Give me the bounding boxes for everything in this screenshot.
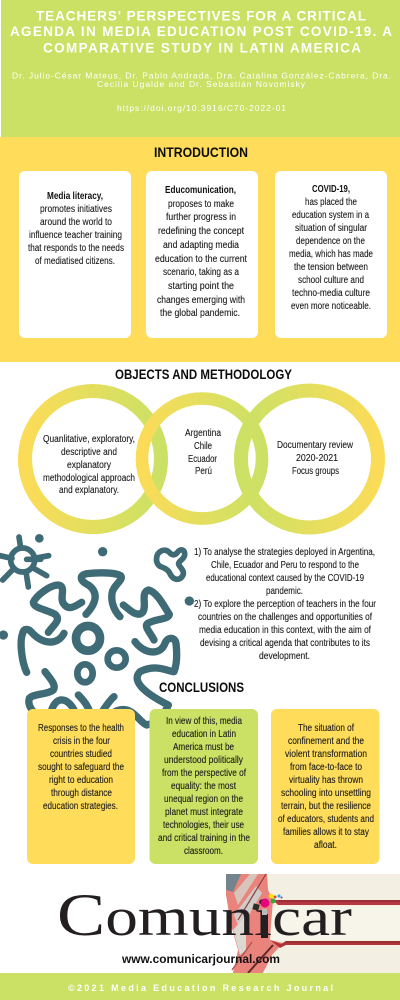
card: confinement and resilience: from face-to-face to [290, 762, 362, 773]
card: health crisis responses: crisis in the four [53, 736, 111, 747]
card: equality perspective [150, 709, 258, 864]
card: media literacy: Media literacy, [47, 190, 103, 202]
footer: ©2021 Media Education Research Journal [68, 983, 333, 993]
card: equality perspective: understood politically [164, 755, 243, 766]
ring text: methods: 2020-2021 [296, 453, 338, 464]
illustration: stack of books [226, 874, 400, 973]
heading: objects and methodology: OBJECTS AND METHODOLOGY [115, 367, 292, 382]
card: equality perspective: education in Latin [172, 729, 236, 740]
ring text: approach: and explanatory. [59, 485, 119, 496]
logo: Comunicar: Comunicar [57, 883, 352, 949]
card: confinement and resilience: The situation of [298, 723, 354, 734]
ring text: approach: methodological approach [43, 473, 135, 484]
card: covid-19: situation of singular [295, 223, 368, 234]
card: health crisis responses: right to education [49, 775, 113, 786]
card: health crisis responses: through distance [51, 788, 112, 799]
card: covid-19: has placed the [305, 197, 357, 208]
card: confinement and resilience: violent transformation [285, 749, 367, 760]
card: educomunication: scenario, taking as a [163, 267, 239, 278]
card: confinement and resilience: virtuality has thrown [289, 775, 363, 786]
card: covid-19: COVID-19, [312, 183, 350, 195]
card: equality perspective: equality: the most [171, 781, 236, 792]
icon: small germ [0, 537, 49, 587]
card: confinement and resilience: confinement and the [288, 736, 364, 747]
card: confinement and resilience: schooling into unsettling [281, 788, 371, 799]
title: COMPARATIVE STUDY IN LATIN AMERICA [43, 40, 361, 56]
icon: small blob [156, 550, 185, 579]
card: covid-19: dependence on the [296, 236, 365, 247]
title [10, 8, 392, 56]
card: confinement and resilience: of educators, students and [278, 814, 374, 825]
ring text: methods: Focus groups [292, 466, 339, 477]
icon: coronavirus illustration [0, 534, 194, 725]
card: educomunication: the global pandemic. [160, 308, 240, 319]
card: educomunication: proposes to make [168, 199, 234, 210]
card: confinement and resilience: families allows it to stay [283, 827, 369, 838]
card: equality perspective: In view of this, media [166, 716, 242, 727]
panel: introduction [0, 137, 400, 362]
card: educomunication: changes emerging with [157, 295, 245, 306]
ring text: approach: descriptive and [61, 447, 117, 458]
heading: introduction: INTRODUCTION [154, 145, 248, 160]
authors: Dr. Julio-César Mateus, Dr. Pablo Andrada, Dra. Catalina González-Cabrera, Dra. [12, 70, 391, 80]
card: equality perspective: classroom. [184, 846, 223, 857]
card: confinement and resilience: terrain, but the resilience [281, 801, 371, 812]
card: equality perspective: from the perspective of [162, 768, 246, 779]
card: covid-19 [275, 171, 387, 338]
card: educomunication [146, 171, 258, 338]
authors [12, 70, 391, 89]
card: health crisis responses: sought to safeguard the [38, 762, 124, 773]
card: educomunication: redefining the concept [158, 226, 244, 237]
card: media literacy: of mediatised citizens. [35, 256, 115, 267]
ring text: approach: explanatory [67, 460, 111, 471]
ring text: approach: Quanlitative, exploratory, [43, 434, 135, 445]
card: health crisis responses: countries studied [50, 749, 112, 760]
text block: objectives: pandemic. [266, 586, 303, 597]
card: educomunication: starting point the [168, 281, 234, 292]
card: media literacy: promotes initiatives [40, 204, 112, 215]
panel: title header [1, 0, 400, 137]
icon: usb stick [252, 903, 268, 938]
website url: www.comunicarjournal.com [121, 954, 280, 966]
card: covid-19: techno-media culture [292, 288, 370, 299]
card: equality perspective: unequal region on the [164, 794, 243, 805]
card: equality perspective: America must be [173, 742, 234, 753]
ring text: countries: Ecuador [188, 454, 218, 465]
card: covid-19: the tension between [294, 262, 368, 273]
venn diagram: three interlocking rings [25, 390, 378, 528]
card: media literacy: influence teacher training [29, 230, 122, 241]
icon: coloured dots [260, 894, 282, 908]
doi link: https://doi.org/10.3916/C70-2022-01 [117, 103, 286, 113]
footer [0, 973, 400, 1000]
card: media literacy [19, 171, 131, 338]
card: educomunication: further progress in [166, 212, 236, 223]
card: confinement and resilience [271, 709, 380, 864]
ring text: methods: Documentary review [277, 440, 354, 451]
text block: objectives [194, 547, 377, 662]
card: health crisis responses [27, 709, 135, 864]
icon: floating dots [0, 534, 194, 640]
ring text: countries [185, 428, 221, 477]
text block: objectives: Chile, Ecuador and Peru to respond to the [211, 560, 359, 571]
card: covid-19: education system in a [292, 210, 369, 221]
card: media literacy: around the world to [40, 217, 112, 228]
card: covid-19: media, which has made [289, 249, 373, 260]
icon: virus spikes [81, 573, 121, 617]
ring text: countries: Chile [194, 441, 212, 452]
title: TEACHERS' PERSPECTIVES FOR A CRITICAL [36, 8, 366, 24]
icon: virus body rings [76, 626, 126, 682]
ring text: methods [277, 440, 354, 477]
card: equality perspective: and critical training in the [158, 833, 250, 844]
ring text: countries: Argentina [185, 428, 221, 439]
heading: conclusions: CONCLUSIONS [159, 680, 244, 695]
card: equality perspective: technologies, their use [163, 820, 244, 831]
ring text: countries: Perú [195, 466, 212, 477]
card: educomunication: education to the current [155, 254, 247, 265]
card: confinement and resilience: afloat. [314, 840, 337, 851]
card: covid-19: school culture and [298, 275, 364, 286]
card: educomunication: Educomunication, [165, 184, 236, 196]
title: AGENDA IN MEDIA EDUCATION POST COVID-19. A [10, 24, 392, 39]
text block: objectives: development. [259, 651, 310, 662]
card: covid-19: even more noticeable. [291, 301, 371, 312]
card: health crisis responses: Responses to the health [38, 723, 124, 734]
ring text: approach [43, 434, 135, 496]
card: equality perspective: planet must integrate [165, 807, 243, 818]
authors: Cecilia Ugalde and Dr. Sebastián Novomisky [97, 79, 306, 89]
card: media literacy: that responds to the needs [28, 243, 124, 254]
card: health crisis responses: education strategies. [43, 801, 118, 812]
card: educomunication: and adapting media [163, 240, 239, 251]
